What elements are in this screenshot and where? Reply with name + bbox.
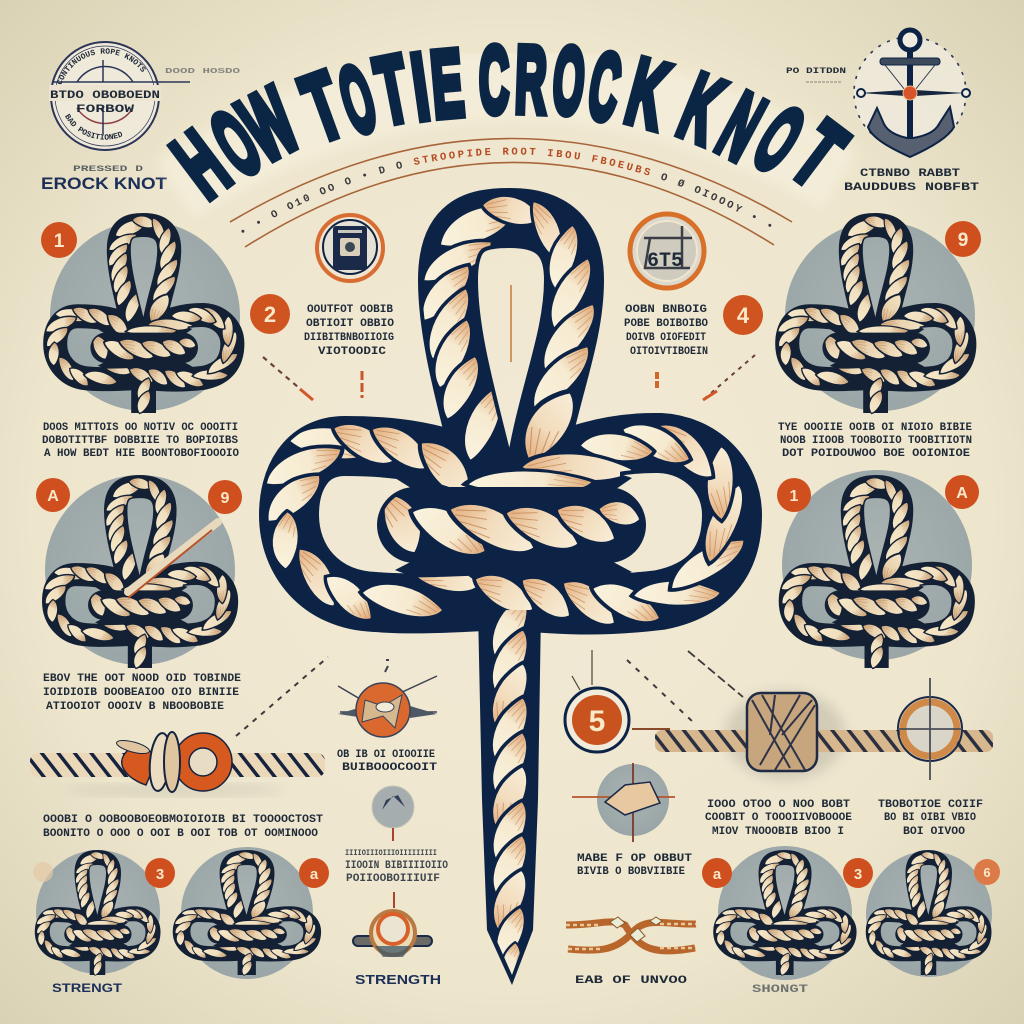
- badge A left: A: [47, 488, 59, 505]
- tool stick: [128, 522, 218, 592]
- step 2 text: [304, 304, 394, 358]
- badge 5: 5: [589, 705, 605, 738]
- right text block 1: [705, 799, 852, 838]
- title: how to tie crock knot: T: [774, 103, 863, 206]
- anchor caption: CTBNBO RABBT: [860, 168, 960, 180]
- step 4 text: [624, 304, 708, 358]
- step 2 text: OBTIOIT OBBIO: [306, 318, 394, 330]
- caption: brand name under stamp: EROCK KNOT: [41, 174, 168, 193]
- arrows under step 2: [263, 357, 362, 400]
- right horizontal rope with knot and ring: [655, 678, 993, 780]
- badge A mid right: [945, 475, 979, 509]
- right step text: TYE OOOIIE OOIB OI NIOIO BIBIE: [778, 422, 972, 434]
- emblem: circular stamp: FORBOW: [76, 104, 135, 116]
- badge 4: 4: [737, 303, 750, 328]
- step 1 text: [42, 422, 239, 460]
- title: how to tie crock knot: N: [703, 74, 779, 180]
- small icon text: POIIOOBOIIIUIF: [346, 873, 440, 885]
- badge 2: [250, 294, 290, 334]
- right text block 1: MIOV TNOOOBIB BIOO I: [712, 826, 844, 838]
- step 4 text: DOIVB OIOFEDIT: [626, 332, 706, 344]
- bottom left text: OOOBI O OOBOOBOEOBMOIOIOIB BI TOOOOCTOST: [43, 814, 323, 826]
- badge a bottom right: [702, 858, 732, 888]
- anchor caption: [844, 168, 980, 194]
- right text block 2: [878, 799, 983, 838]
- cross icon caption: MABE F OP OBBUT: [577, 853, 692, 865]
- subtitle ribbon: • • O O10 OO O • D O STROOPIDE ROOT IBOU FBOEUBS O Ø OIOOOY • •: [241, 148, 772, 233]
- step 2 text: VIOTOODIC: [318, 346, 386, 358]
- right text block 2: BOI OIVOO: [903, 826, 965, 838]
- bottom knot panel c: [712, 846, 855, 980]
- badge 9 mid left: 9: [221, 490, 230, 507]
- small icon text: IIIIOIIIOIIIOIIIIIIIII: [345, 849, 437, 858]
- badge 4: [723, 295, 763, 335]
- title: how to tie crock knot: E: [427, 30, 467, 137]
- title: how to tie crock knot: O: [549, 28, 589, 135]
- bottom left text: BOONITO O OOO O OOI B OOI TOB OT OOMINOOO: [43, 828, 318, 840]
- caption: brand name under stamp: [41, 165, 168, 193]
- medallion: top right icon: [630, 214, 704, 288]
- badge 5: [565, 650, 670, 752]
- title: how to tie crock knot: [155, 27, 863, 217]
- badge 3 bottom: [145, 858, 175, 888]
- title halo: [175, 85, 840, 190]
- step 1 knot panel: [42, 212, 242, 415]
- badge 6 faded: [974, 859, 1000, 885]
- cross icon caption: BIVIB O BOBVIIBIE: [577, 866, 685, 878]
- mid left text: [43, 673, 241, 713]
- badge 1: [41, 222, 77, 258]
- faded badge: [33, 862, 53, 882]
- step 1 text: DOOS MITTOIS OO NOTIV OC OOOITI: [43, 422, 238, 434]
- badge 9 mid left: [208, 480, 242, 514]
- emblem: circular stamp: BAD POSITIONED: [65, 114, 122, 140]
- main rope tail: [478, 590, 541, 985]
- bottom knot panel d: [865, 849, 992, 977]
- bottom knot panel b: [172, 847, 320, 979]
- badge A mid right: A: [956, 485, 968, 502]
- title: how to tie crock knot: I: [406, 35, 435, 140]
- medallion caption: OB IB OI OIOOIIE: [337, 749, 435, 761]
- small icon text: [345, 849, 448, 885]
- title: how to tie crock knot: O: [737, 88, 820, 192]
- anchor emblem: [786, 30, 970, 157]
- right text block 2: BO BI OIBI VBIO: [884, 812, 976, 824]
- medallion: top right icon: 6T5: [647, 250, 683, 273]
- title: how to tie crock knot: O: [328, 46, 387, 155]
- title: how to tie crock knot: T: [290, 52, 356, 162]
- mid left text: EBOV THE OOT NOOD OID TOBINDE: [43, 673, 241, 685]
- badge 1: 1: [54, 231, 65, 252]
- mid right knot panel: [777, 470, 973, 670]
- medallion caption: BUIBOOOCOOIT: [342, 762, 437, 774]
- anchor caption: BAUDDUBS NOBFBT: [844, 182, 980, 194]
- emblem: circular stamp: [49, 41, 240, 151]
- title: how to tie crock knot: T: [368, 35, 417, 144]
- title: how to tie crock knot: C: [479, 28, 509, 133]
- medallion: top left icon: [317, 215, 383, 281]
- ornamental orange knot: [566, 917, 696, 951]
- right text block 1: COOBIT O TOOOIIVOBOOOE: [705, 812, 852, 824]
- cross icon caption: [577, 853, 692, 878]
- emblem: circular stamp: DOOD HOSDO: [165, 68, 240, 76]
- emblem: circular stamp: BTDO OBOBOEDN: [50, 90, 160, 102]
- badge 9: [945, 221, 981, 257]
- small gray icon: [372, 786, 414, 841]
- mid left text: IOIDIOIB DOOBEAIOO OIO BINIIE: [43, 687, 239, 699]
- title: how to tie crock knot: H: [155, 111, 247, 217]
- ring icon: [353, 892, 432, 957]
- title: how to tie crock knot: R: [513, 27, 548, 133]
- tan knot: [747, 693, 817, 771]
- badge 3 bottom right: 3: [854, 866, 862, 883]
- caption: brand name under stamp: PRESSED D: [73, 165, 143, 174]
- gray cross icon: [572, 763, 675, 842]
- badge a bottom right: a: [713, 866, 722, 883]
- badge 9: 9: [958, 230, 968, 251]
- title: how to tie crock knot: C: [581, 34, 628, 142]
- mid left knot panel: [40, 474, 236, 670]
- step 4 text: POBE BOIBOIBO: [624, 318, 708, 330]
- right text block 1: IOOO OTOO O NOO BOBT: [707, 799, 850, 811]
- step 1 text: A HOW BEDT HIE BOONTOBOFIOOOIO: [44, 448, 239, 460]
- title: how to tie crock knot: O: [195, 92, 278, 196]
- badge 3 bottom right: [843, 858, 873, 888]
- bottom knot panel a: [34, 849, 160, 976]
- badge bottom 2: [299, 858, 329, 888]
- right step text: DOT POIDOUWOO BOE OOIONIOE: [782, 448, 970, 460]
- step 1 text: DOBOTITTBF DOBBIIE TO BOPIOIBS: [42, 435, 238, 447]
- step 4 text: OITOIVTIBOEIN: [630, 346, 708, 358]
- center loop tick mark: [510, 285, 512, 362]
- badge 3 bottom: 3: [156, 866, 164, 883]
- arrows under step 4: [657, 355, 755, 400]
- main knot head: [255, 184, 757, 637]
- bottom left text: [43, 814, 323, 840]
- step 2 text: OOUTFOT OOBIB: [307, 304, 393, 316]
- ornamental knot label: EAB OF UNVOO: [575, 975, 688, 987]
- right step text: NOOB IIOOB TOOBOIIO TOOBITIOTN: [780, 435, 972, 447]
- right text block 2: TBOBOTIOE COIIF: [878, 799, 983, 811]
- title: how to tie crock knot: W: [225, 68, 314, 181]
- label strength small: STRENGT: [52, 981, 123, 995]
- step 9 knot panel: [774, 212, 975, 415]
- medallion caption: [337, 749, 437, 774]
- anchor emblem: PO DITDDN: [786, 67, 846, 76]
- mid left text: ATIOOIOT OOOIV B NBOOBOBIE: [46, 701, 224, 713]
- badge 6 faded: 6: [983, 865, 991, 880]
- central large rope knot: [255, 184, 757, 985]
- badge 2: 2: [264, 302, 276, 327]
- badge bottom 2: a: [310, 866, 319, 883]
- badge 1 mid right: 1: [790, 488, 799, 505]
- right step text: [778, 422, 972, 460]
- title: how to tie crock knot: K: [617, 38, 678, 149]
- small icon text: IIOOIN BIBIIIIOIIO: [345, 860, 448, 872]
- left horizontal rope with orange knot: [30, 657, 328, 795]
- strength label: STRENGTH: [355, 972, 441, 987]
- badge 1 mid right: [777, 478, 811, 512]
- step 2 text: DIIBITBNBOIIOIG: [304, 332, 394, 344]
- label short: SHONGT: [752, 984, 809, 996]
- step 4 text: OOBN BNBOIG: [625, 304, 707, 316]
- title: how to tie crock knot: K: [667, 53, 736, 164]
- medallion: orange bow: [338, 660, 437, 737]
- dashed diagonals: [627, 651, 743, 722]
- badge A left: [36, 478, 70, 512]
- emblem: circular stamp: CONTINUOUS ROPE KNOTS: [57, 48, 146, 84]
- ring with crosshair: [898, 678, 962, 780]
